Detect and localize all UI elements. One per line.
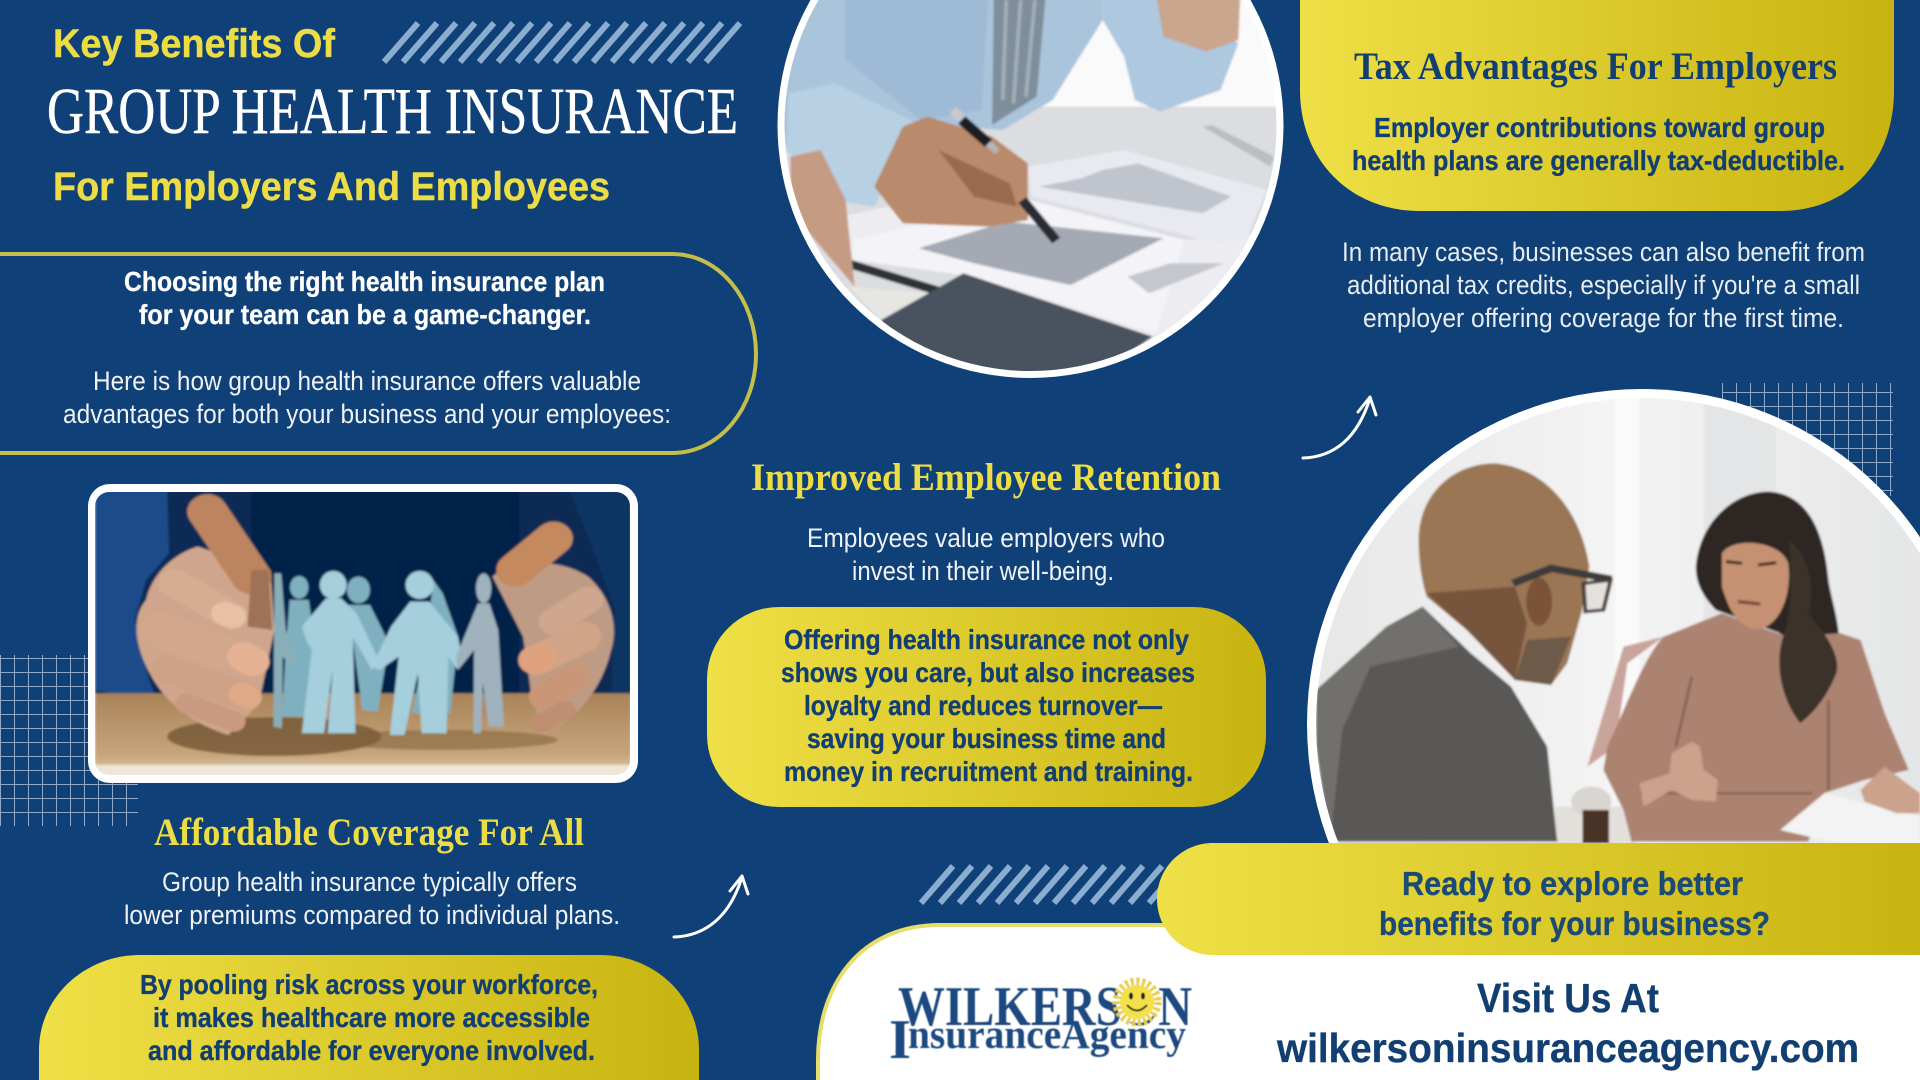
callout: retention: saving your business time and xyxy=(807,723,1166,754)
heading: improved employee retention: Improved Employee Retention xyxy=(751,456,1221,499)
callout: retention: shows you care, but also increases xyxy=(781,657,1195,688)
heading: tax advantages: Tax Advantages For Employers xyxy=(1354,45,1837,88)
decorative grid left xyxy=(0,655,138,826)
intro regular text: Here is how group health insurance offers valuable xyxy=(93,366,641,396)
intro bold text: Choosing the right health insurance plan xyxy=(124,266,605,297)
decorative stripes bottom xyxy=(921,866,1181,903)
text: tax credits: employer offering coverage for the first time. xyxy=(1363,303,1844,333)
folder xyxy=(880,272,1153,371)
text: tax credits: In many cases, businesses can also benefit from xyxy=(1342,237,1865,267)
logo: wilkerson insurance agency: WILKERSON xyxy=(898,976,1192,1038)
logo: wilkerson insurance agency xyxy=(889,976,1192,1071)
text: tax credits: additional tax credits, especially if you're a small xyxy=(1347,270,1860,300)
heading: for employers and employees: For Employers And Employees xyxy=(53,165,610,209)
decorative grid right xyxy=(1722,383,1893,496)
photo: signing insurance policy xyxy=(778,0,1284,378)
text: retention body xyxy=(807,523,1165,586)
intro bold text line 2: for your team can be a game-changer. xyxy=(139,299,591,330)
callout: retention: money in recruitment and training. xyxy=(784,756,1193,787)
text: website url: wilkersoninsuranceagency.com xyxy=(1276,1025,1859,1071)
notebook and papers xyxy=(847,206,1250,346)
text: retention body: invest in their well-being. xyxy=(852,556,1114,586)
text: retention body: Employees value employers who xyxy=(807,523,1165,553)
hand with pen xyxy=(874,117,1028,227)
arrow: to retention xyxy=(674,876,748,937)
callout: pooling risk: By pooling risk across your workforce, xyxy=(140,969,598,1000)
callout: ready to explore xyxy=(1157,843,1920,955)
text: tax credits xyxy=(1342,237,1865,333)
panel: intro outline xyxy=(0,254,756,453)
callout: ready to explore: benefits for your business? xyxy=(1379,905,1770,942)
shirt xyxy=(784,0,1104,148)
text: affordable coverage body: Group health insurance typically offers xyxy=(162,867,577,897)
tax bold text: Employer contributions toward group xyxy=(1374,112,1825,143)
logo: wilkerson insurance agency: nsuranceAgency xyxy=(908,1011,1186,1057)
callout: retention: loyalty and reduces turnover— xyxy=(804,690,1162,721)
callout: ready to explore: Ready to explore better xyxy=(1402,865,1743,902)
callout: pooling risk xyxy=(39,955,699,1080)
logo: wilkerson insurance agency: I xyxy=(889,1009,911,1071)
woman xyxy=(1694,490,1840,637)
callout: retention xyxy=(707,607,1266,807)
callout: pooling risk: it makes healthcare more accessible xyxy=(153,1002,590,1033)
heading: affordable coverage: Affordable Coverage For All xyxy=(154,811,584,854)
right hand xyxy=(492,563,614,735)
intro regular text line 2: advantages for both your business and your employees: xyxy=(63,399,671,429)
arrow: to tax advantages xyxy=(1303,397,1376,458)
panel: tax advantages xyxy=(1300,0,1894,211)
left hand xyxy=(137,547,274,735)
text: affordable coverage body xyxy=(124,867,620,930)
back figures xyxy=(282,576,458,717)
icon: smiling sun xyxy=(1116,981,1158,1023)
front figures xyxy=(302,571,462,735)
title block xyxy=(47,22,738,209)
text: visit us at: Visit Us At xyxy=(1477,975,1659,1021)
text: affordable coverage body: lower premiums compared to individual plans. xyxy=(124,900,620,930)
callout: retention: Offering health insurance not only xyxy=(784,624,1189,655)
decorative stripes top xyxy=(384,23,740,62)
man xyxy=(1419,463,1589,685)
photo: two people in meeting xyxy=(1307,389,1920,843)
tax bold text: health plans are generally tax-deductible. xyxy=(1352,145,1845,176)
callout: pooling risk: and affordable for everyone involved. xyxy=(148,1035,595,1066)
heading: key benefits of: Key Benefits Of xyxy=(53,22,336,66)
heading: group health insurance: GROUP HEALTH INSURANCE xyxy=(47,75,738,148)
photo: paper people protected by hands xyxy=(88,484,638,783)
panel: website footer xyxy=(818,925,1920,1080)
tax bold text xyxy=(1352,112,1845,176)
